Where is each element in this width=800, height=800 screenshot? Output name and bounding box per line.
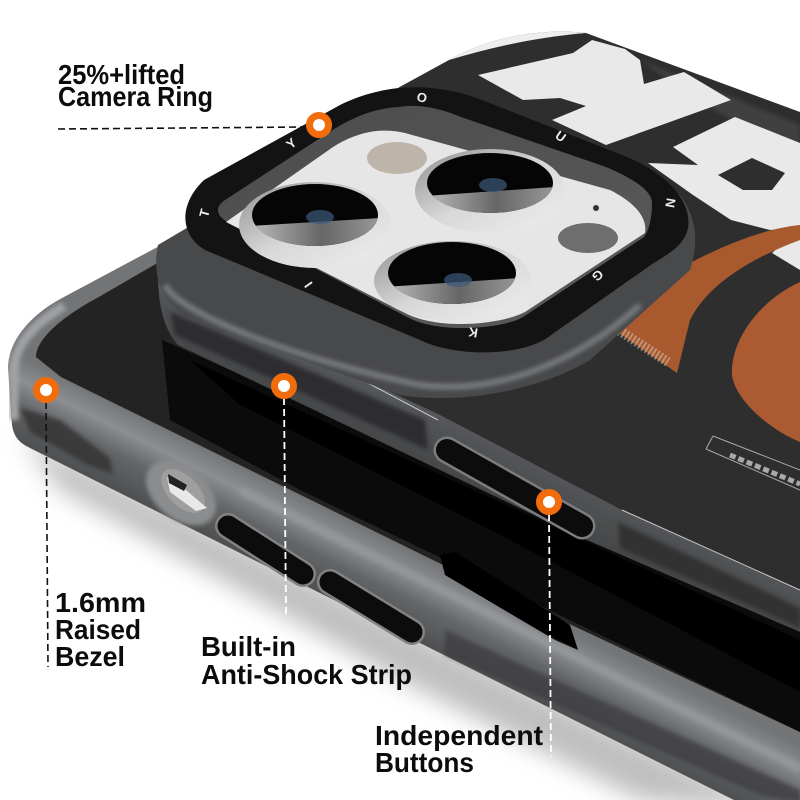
lens 1 — [239, 182, 391, 268]
side anti-shock strip — [170, 312, 428, 450]
microphone dot — [593, 205, 599, 211]
ring letters: K — [467, 324, 479, 341]
button 1 — [228, 526, 303, 574]
ring letters: G — [589, 267, 606, 285]
callout: anti-shock strip: Built-in — [201, 631, 296, 662]
ring letters: N — [662, 197, 679, 209]
camera ring — [185, 87, 688, 352]
screen — [36, 250, 800, 732]
phone back case — [158, 32, 800, 632]
camera plate — [226, 131, 645, 324]
bezel light stripe — [240, 490, 800, 768]
callout: independent buttons — [375, 492, 558, 778]
reflected button — [440, 552, 578, 650]
callout: anti-shock strip — [201, 376, 412, 690]
camera bump — [156, 87, 695, 398]
top corner translucent highlight — [449, 32, 586, 60]
phone front with raised bezel — [8, 235, 800, 800]
ring letters — [196, 89, 679, 341]
flash — [367, 142, 427, 174]
ring letters: U — [553, 128, 569, 145]
callout: camera ring — [58, 59, 328, 134]
callout: raised bezel — [36, 380, 146, 672]
ring letters: O — [415, 89, 429, 106]
blueprint label — [706, 436, 800, 490]
lidar sensor — [558, 223, 618, 253]
lens 3 — [374, 241, 532, 321]
bezel highlight on corner — [14, 306, 64, 420]
lens 2 — [415, 149, 565, 233]
callout: anti-shock strip: Anti-Shock Strip — [201, 659, 412, 690]
ring letters: Y — [283, 135, 300, 152]
charging port — [134, 447, 228, 539]
button 2 — [330, 582, 412, 632]
side power button — [447, 450, 582, 526]
callout: raised bezel: Bezel — [55, 641, 125, 672]
callout: raised bezel: Raised — [55, 614, 141, 645]
side band — [158, 200, 800, 632]
white graphic lettering — [478, 40, 800, 270]
screen black reflection — [162, 340, 800, 732]
edge line — [214, 302, 800, 590]
callout: camera ring: Camera Ring — [58, 81, 213, 112]
ring letters: T — [196, 207, 213, 219]
orange circle graphic — [732, 282, 800, 442]
callout: camera ring: 25%+lifted — [58, 59, 185, 90]
drop shadow under phone — [20, 435, 800, 800]
lower anti-shock strip — [445, 630, 800, 800]
bump base — [156, 90, 695, 398]
callout: independent buttons: Independent — [375, 720, 543, 751]
callout: raised bezel: 1.6mm — [55, 587, 146, 618]
barcode — [606, 322, 668, 362]
ring letters: I — [301, 279, 316, 290]
back panel — [200, 32, 800, 590]
orange arc graphic — [590, 225, 800, 373]
bezel frame — [8, 235, 800, 800]
callout: independent buttons: Buttons — [375, 747, 474, 778]
ring inner well — [218, 106, 652, 328]
left anti-shock strip — [20, 408, 113, 474]
